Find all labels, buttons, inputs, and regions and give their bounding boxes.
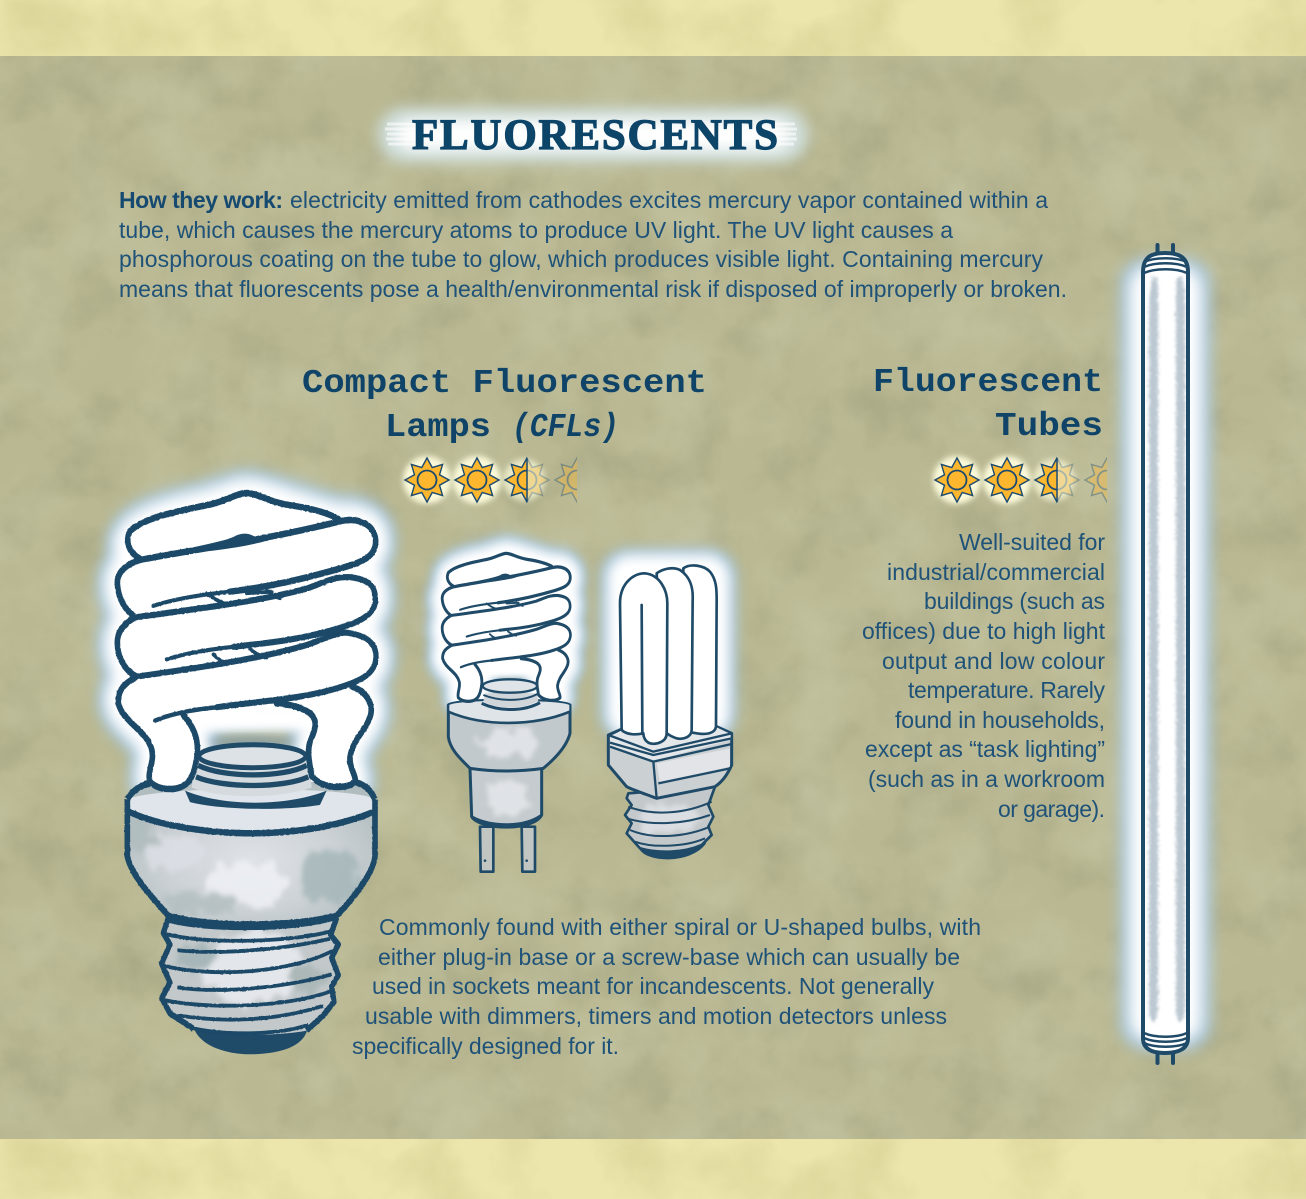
intro text: how they work	[119, 187, 1067, 302]
tube description text: industrial/commercial	[887, 559, 1105, 585]
U-tubes	[620, 565, 717, 744]
icon: fluorescent tube	[1120, 245, 1211, 1063]
rating: CFL suns	[403, 456, 599, 504]
tube description text: except as “task lighting”	[865, 736, 1105, 762]
tube description text	[862, 529, 1106, 822]
intro text: how they work: means that fluorescents pose a health/environmental risk if disposed of improperly or broken.	[119, 276, 1067, 302]
lamp socket opening	[185, 745, 327, 809]
threaded screw base	[162, 918, 338, 1054]
title: FLUORESCENTS	[412, 112, 778, 159]
rating: tube suns	[933, 456, 1129, 504]
heading: fluorescent tubes: Tubes	[995, 408, 1103, 445]
CFL description text: used in sockets meant for incandescents. Not generally	[372, 973, 934, 999]
icon: U-shaped CFL with screw base	[600, 548, 737, 858]
top band	[0, 0, 1306, 56]
plug base	[448, 679, 570, 827]
intro text: how they work: electricity emitted from cathodes excites mercury vapor contained within a	[290, 187, 1048, 213]
tube description text: offices) due to high light	[862, 618, 1106, 644]
icon: large spiral CFL bulb	[117, 493, 376, 1054]
tube description text: temperature. Rarely	[908, 677, 1106, 703]
small bulb glow	[442, 553, 570, 701]
heading: fluorescent tubes	[873, 364, 1103, 445]
bulb collar	[123, 745, 375, 924]
heading: compact fluorescent lamps: Compact Fluorescent	[302, 365, 707, 402]
tube description text: output and low colour	[882, 648, 1105, 674]
intro text: how they work: phosphorous coating on the tube to glow, which produces visible light. Containing mercury	[119, 246, 1044, 272]
tube description text: (such as in a workroom	[868, 766, 1105, 792]
CFL description text: either plug-in base or a screw-base which can usually be	[378, 944, 960, 970]
icon: small spiral CFL with plug-in base	[442, 553, 570, 872]
intro text: how they work: How they work:	[119, 187, 283, 213]
tube description text: or garage).	[998, 796, 1105, 822]
CFL description text: specifically designed for it.	[352, 1033, 619, 1059]
intro text: how they work: tube, which causes the mercury atoms to produce UV light. The UV light causes a	[119, 217, 953, 243]
heading: compact fluorescent lamps	[302, 365, 707, 446]
small spiral tube	[442, 553, 570, 701]
CFL description text: Commonly found with either spiral or U-shaped bulbs, with	[379, 914, 981, 940]
heading: compact fluorescent lamps: (CFLs)	[512, 409, 619, 446]
spiral tube	[117, 493, 376, 789]
heading: compact fluorescent lamps: Lamps	[385, 409, 491, 446]
tube description text: buildings (such as	[924, 588, 1105, 614]
heading: fluorescent tubes: Fluorescent	[873, 364, 1103, 401]
U-tube glow	[600, 548, 737, 742]
CFL description text	[352, 914, 981, 1059]
bottom band	[0, 1139, 1306, 1199]
tube description text: found in households,	[895, 707, 1105, 733]
screw base	[608, 727, 732, 858]
bulb glow	[117, 493, 376, 789]
tube description text: Well-suited for	[959, 529, 1105, 555]
plug pins	[480, 827, 535, 872]
CFL description text: usable with dimmers, timers and motion detectors unless	[365, 1003, 947, 1029]
